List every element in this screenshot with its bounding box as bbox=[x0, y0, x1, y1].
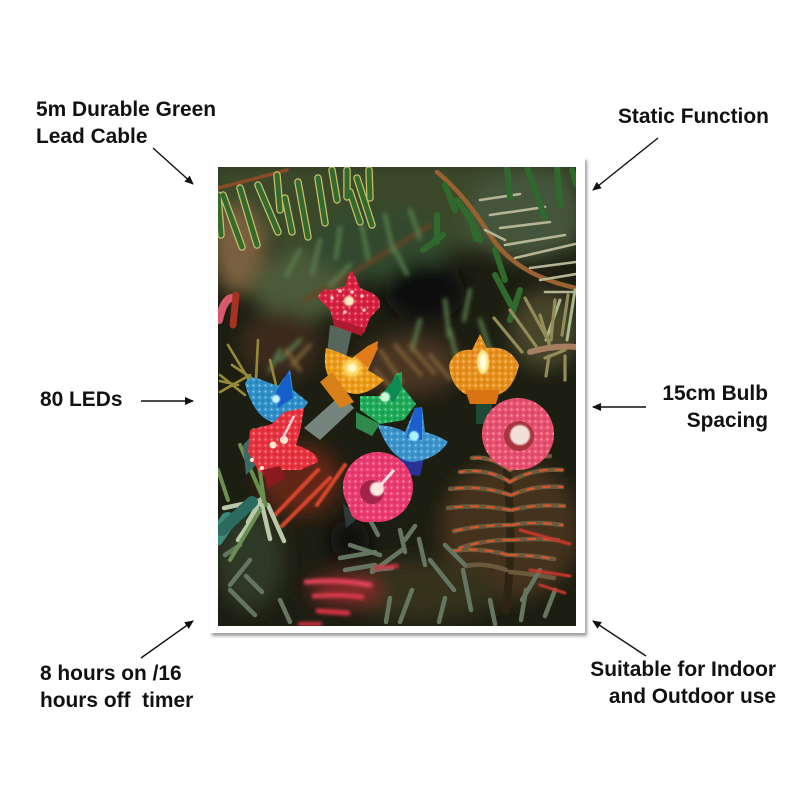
bulb: pink lower bbox=[343, 452, 413, 522]
bulb: red crown top bbox=[318, 271, 380, 336]
bulb stems bbox=[243, 325, 492, 528]
bulb: red lower left bbox=[248, 408, 318, 488]
top branch stem and needles bbox=[218, 168, 576, 395]
label: 80 LEDs: 80 LEDs bbox=[40, 388, 122, 411]
label: Static Function: Static Function bbox=[618, 105, 769, 128]
lower foliage with red glow bbox=[216, 430, 570, 624]
label: 5m Durable Green Lead Cable: 5m Durable Green bbox=[36, 98, 216, 121]
label: Suitable for Indoor and Outdoor use: and Outdoor use bbox=[609, 685, 776, 708]
label: Suitable for Indoor and Outdoor use: Suitable for Indoor bbox=[590, 658, 776, 681]
bulb: amber left bbox=[320, 341, 384, 408]
soft branches bbox=[270, 210, 490, 394]
label: 15cm Bulb Spacing: 15cm Bulb bbox=[662, 382, 768, 405]
bulb: blue centre bbox=[378, 407, 448, 476]
blurred background foliage bbox=[210, 160, 585, 620]
bulb: green bbox=[360, 372, 416, 424]
arrow: 80 LEDs bbox=[141, 400, 193, 402]
bulb: pink right bbox=[482, 398, 554, 470]
left pink bulb and needles bbox=[220, 340, 276, 395]
bulb: amber right bbox=[449, 334, 519, 404]
label: 15cm Bulb Spacing: Spacing bbox=[687, 409, 768, 432]
bulb: blue left bbox=[245, 370, 308, 423]
arrow: static function bbox=[593, 138, 658, 190]
label: 8 hours on /16 hours off timer: 8 hours on /16 bbox=[40, 662, 182, 685]
photo frame bbox=[210, 157, 587, 636]
label: 5m Durable Green Lead Cable: Lead Cable bbox=[36, 125, 147, 148]
label: 8 hours on /16 hours off timer: hours off timer bbox=[40, 689, 193, 712]
right branch bbox=[437, 172, 576, 288]
arrow: cable bbox=[153, 148, 193, 184]
photo: Christmas tree with coloured lights bbox=[210, 160, 585, 626]
arrow: timer bbox=[141, 621, 193, 658]
arrow: indoor outdoor bbox=[593, 621, 646, 656]
arrow: bulb spacing bbox=[593, 406, 646, 408]
